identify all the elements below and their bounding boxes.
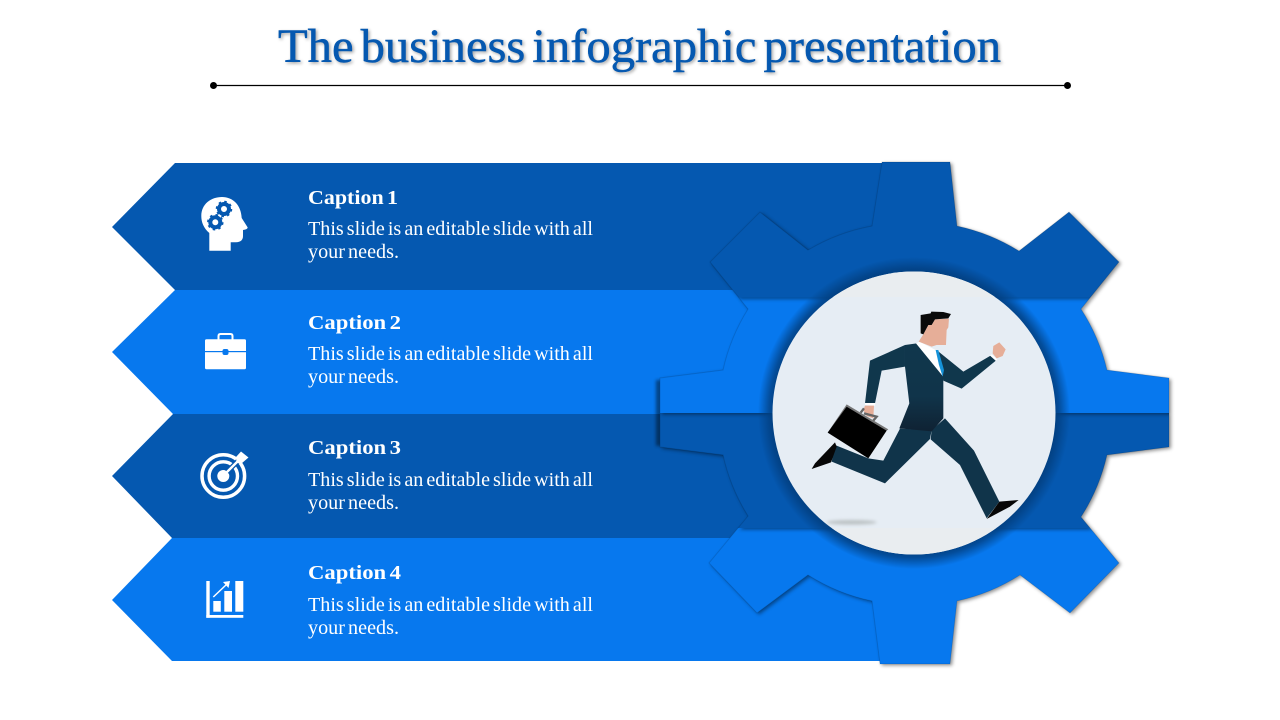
left tooth edge shadow: [656, 380, 661, 446]
text block: caption 4: Caption 4: [308, 562, 401, 584]
text block: caption 4: your needs.: [308, 617, 399, 639]
briefcase: [828, 404, 888, 458]
icon: briefcase: [205, 334, 246, 369]
panel: arrow band 1: [112, 163, 900, 290]
gear band 3: [660, 412, 1174, 532]
shirt and tie: [916, 342, 944, 377]
hands: [863, 342, 1006, 418]
shoes: [812, 442, 1019, 519]
text block: caption 3: This slide is an editable slide with all: [308, 469, 593, 491]
text block: caption 1: your needs.: [308, 241, 399, 263]
front arm: [937, 351, 997, 389]
cuffs: [865, 354, 997, 406]
icon: head with gears: [201, 197, 248, 251]
gear 1: [217, 202, 231, 216]
back leg and front leg: [832, 418, 999, 518]
arm holding briefcase: [865, 345, 905, 403]
head and neck: [919, 319, 949, 347]
gear band 2: [660, 298, 1174, 416]
text block: caption 2: your needs.: [308, 366, 399, 388]
text block: caption 2: Caption 2: [308, 312, 401, 334]
text block: caption 4: This slide is an editable slide with all: [308, 594, 593, 616]
text block: caption 2: This slide is an editable slide with all: [308, 343, 593, 365]
panel: arrow band 2: [112, 290, 900, 414]
gear: [656, 162, 1169, 664]
gear band 1: [710, 161, 1122, 302]
gear band 4: [708, 528, 1122, 668]
gear centre disc: [770, 270, 1060, 560]
icon: target with arrow: [202, 452, 248, 497]
text block: caption 1: [308, 187, 593, 263]
text block: caption 3: [308, 437, 593, 514]
text block: caption 2: [308, 312, 593, 388]
panel: arrow band 4: [112, 538, 900, 661]
panel: arrow band 3: [112, 414, 900, 538]
illustration: running businessman: [812, 312, 1019, 525]
title: The business infographic presentation: [278, 20, 1001, 73]
text block: caption 3: Caption 3: [308, 437, 401, 459]
text block: caption 3: your needs.: [308, 492, 399, 514]
gear 2: [208, 215, 222, 229]
torso: [899, 343, 943, 431]
text block: caption 1: Caption 1: [308, 187, 398, 209]
title underline with end dots: [210, 82, 1071, 89]
ground shadow: [827, 520, 877, 525]
hair: [921, 312, 951, 334]
icon: bar chart with arrow: [206, 581, 243, 618]
gear centre ring: [758, 257, 1070, 569]
text block: caption 1: This slide is an editable slide with all: [308, 218, 593, 240]
text block: caption 4: [308, 562, 593, 639]
